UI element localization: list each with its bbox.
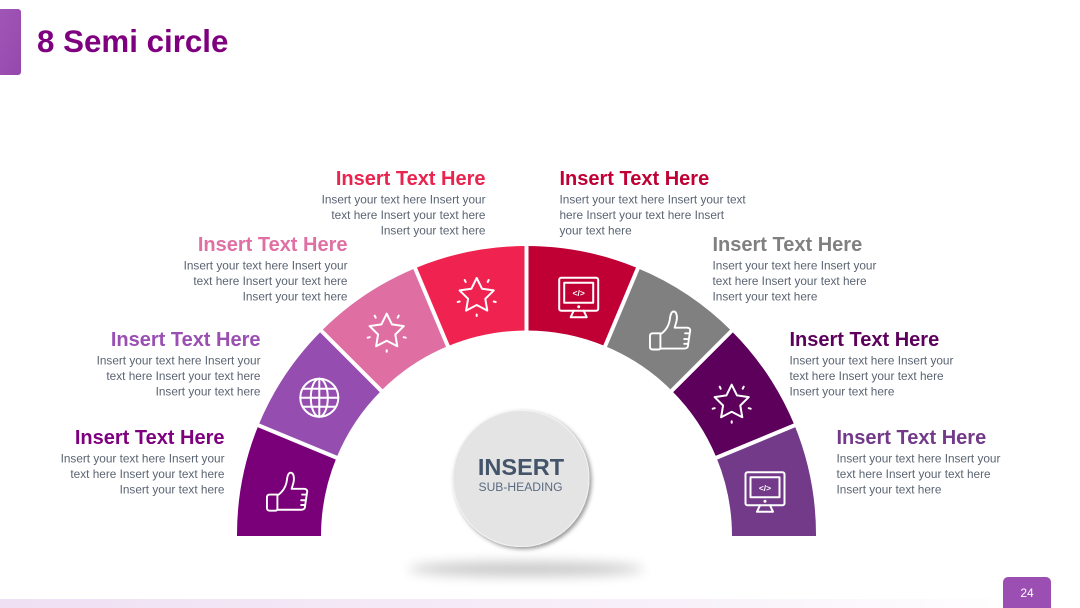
text block 4: top left: text here Insert your text here bbox=[331, 208, 486, 222]
segment 4: star bbox=[416, 246, 526, 346]
text block 6: upper right: Insert your text here bbox=[712, 290, 818, 304]
text block 7: mid right: Insert your text here bbox=[790, 384, 895, 398]
text block 3: upper left: text here Insert your text here bbox=[193, 274, 348, 288]
text block 5: top right: your text here bbox=[560, 224, 632, 238]
text block 6: upper right: Insert your text here Insert your bbox=[712, 258, 876, 272]
text block 8: lower right: text here Insert your text here bbox=[836, 467, 991, 481]
text block 3: upper left: Insert your text here bbox=[243, 290, 348, 304]
text block 7: mid right bbox=[790, 329, 953, 398]
text block 6: upper right: text here Insert your text here bbox=[712, 274, 867, 288]
text block 7: mid right: Insert your text here Insert your bbox=[790, 354, 953, 368]
text block 5: top right: Insert Text Here bbox=[560, 168, 709, 190]
footer band bbox=[0, 599, 1080, 608]
text block 2: mid left: Insert your text here Insert your bbox=[97, 354, 261, 368]
text block 5: top right bbox=[560, 168, 746, 238]
segment 1: thumbs up bbox=[237, 425, 337, 536]
center circle floor shadow bbox=[408, 562, 644, 576]
header accent bar bbox=[0, 9, 21, 75]
text block 2: mid left: text here Insert your text here bbox=[106, 369, 261, 383]
text block 6: upper right: Insert Text Here bbox=[712, 234, 862, 256]
text block 8: lower right bbox=[836, 427, 1000, 496]
text block 2: mid left: Insert your text here bbox=[156, 384, 261, 398]
text block 1: lower left: Insert your text here Insert your bbox=[61, 452, 225, 466]
center circle bbox=[453, 410, 589, 546]
center circle: INSERT bbox=[478, 454, 565, 480]
text block 7: mid right: text here Insert your text here bbox=[790, 369, 944, 383]
title: 8 Semi circle bbox=[37, 24, 228, 59]
page number badge: 24 bbox=[1020, 586, 1034, 600]
text block 1: lower left: text here Insert your text here bbox=[70, 467, 225, 481]
text block 3: upper left: Insert Text Here bbox=[198, 234, 348, 256]
text block 8: lower right: Insert your text here Insert your bbox=[836, 452, 1000, 466]
text block 2: mid left: Insert Text Here bbox=[111, 329, 260, 351]
text block 8: lower right: Insert Text Here bbox=[836, 427, 986, 449]
segment 2: globe bbox=[259, 331, 381, 457]
segment 7: star bbox=[672, 331, 794, 457]
segment 6: thumbs up bbox=[605, 268, 732, 391]
segment 8: monitor: </> bbox=[759, 483, 771, 493]
text block 3: upper left bbox=[184, 234, 348, 304]
text block 4: top left: Insert Text Here bbox=[336, 168, 486, 190]
text block 5: top right: Insert your text here Insert your text bbox=[560, 192, 746, 206]
text block 1: lower left: Insert your text here bbox=[120, 482, 225, 496]
text block 4: top left bbox=[322, 168, 486, 238]
center circle: SUB-HEADING bbox=[478, 480, 562, 494]
text block 4: top left: Insert your text here bbox=[381, 224, 486, 238]
text block 2: mid left bbox=[97, 329, 261, 398]
text block 5: top right: here Insert your text here Insert bbox=[560, 208, 725, 222]
text block 6: upper right bbox=[712, 234, 876, 304]
segment 5: monitor bbox=[526, 246, 637, 346]
text block 1: lower left bbox=[61, 427, 225, 496]
segment 5: monitor: </> bbox=[573, 288, 585, 298]
segment 8: monitor bbox=[716, 425, 816, 536]
text block 8: lower right: Insert your text here bbox=[836, 482, 942, 496]
text block 1: lower left: Insert Text Here bbox=[75, 427, 224, 449]
segment 3: star bbox=[321, 268, 448, 391]
page number badge bbox=[1003, 577, 1051, 608]
text block 4: top left: Insert your text here Insert your bbox=[322, 192, 486, 206]
text block 3: upper left: Insert your text here Insert your bbox=[184, 258, 348, 272]
semicircle diagram bbox=[237, 240, 816, 536]
text block 7: mid right: Insert Text Here bbox=[790, 329, 939, 351]
